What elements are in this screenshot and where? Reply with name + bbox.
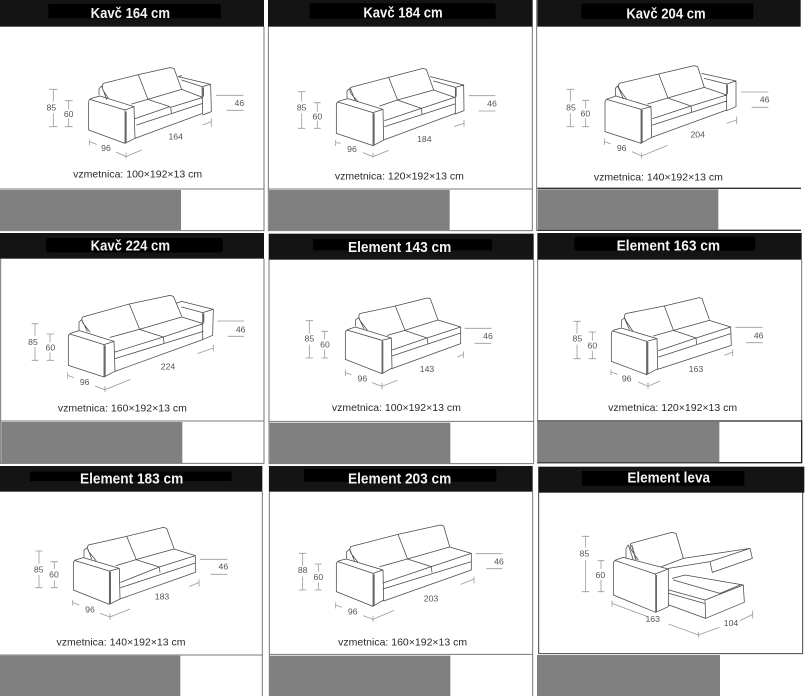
dimension marks: 88 bbox=[298, 565, 308, 575]
dimension marks: 46 bbox=[235, 98, 244, 108]
header: Element 183 cm: Element 183 cm bbox=[80, 471, 183, 487]
panel: Kavč 224 cm bbox=[0, 233, 264, 464]
dimension marks: 46 bbox=[760, 95, 770, 105]
dimension marks bbox=[298, 553, 504, 622]
dimension marks: 203 bbox=[424, 593, 438, 603]
dimension marks: 60 bbox=[46, 342, 55, 352]
grey swatch bbox=[538, 189, 718, 230]
sofa drawing bbox=[73, 527, 195, 604]
sofa drawing bbox=[611, 298, 731, 375]
header: Element 183 cm bbox=[0, 466, 262, 492]
sofa drawing bbox=[605, 66, 736, 143]
dimension marks: 60 bbox=[588, 341, 597, 351]
header: Kavč 204 cm bbox=[537, 0, 801, 27]
header: Kavč 184 cm: Kavč 184 cm bbox=[363, 5, 443, 21]
dimension marks: 60 bbox=[581, 108, 590, 118]
header: Kavč 224 cm: Kavč 224 cm bbox=[91, 239, 170, 255]
dimension marks bbox=[34, 551, 228, 620]
dimension marks: 183 bbox=[155, 591, 169, 601]
dimension marks: 96 bbox=[348, 606, 358, 616]
grey swatch bbox=[0, 656, 180, 696]
mattress size: vzmetnica: 160×192×13 cm bbox=[338, 637, 467, 648]
dimension marks bbox=[566, 89, 770, 158]
header: Element leva bbox=[539, 467, 804, 493]
dimension marks: 46 bbox=[236, 324, 246, 334]
mattress size: vzmetnica: 140×192×13 cm bbox=[594, 172, 723, 183]
dimension marks: 104 bbox=[724, 618, 738, 628]
mattress size: vzmetnica: 160×192×13 cm bbox=[58, 404, 187, 415]
header: Element 203 cm bbox=[269, 466, 533, 492]
grey swatch bbox=[1, 422, 182, 463]
dimension marks: 96 bbox=[622, 374, 632, 384]
dimension marks: 96 bbox=[80, 377, 90, 387]
dimension marks: 164 bbox=[168, 132, 183, 142]
sofa drawing bbox=[345, 298, 461, 374]
dimension marks: 85 bbox=[566, 103, 576, 113]
panel: Element 163 cm bbox=[538, 233, 802, 464]
header: Element leva: Element leva bbox=[627, 471, 711, 487]
header: Kavč 184 cm bbox=[268, 0, 533, 27]
header: Element 143 cm: Element 143 cm bbox=[348, 240, 451, 256]
panel: Kavč 204 cm bbox=[537, 0, 801, 231]
dimension marks: 60 bbox=[49, 570, 59, 580]
header: Element 163 cm: Element 163 cm bbox=[617, 239, 720, 255]
dimension marks: 96 bbox=[85, 604, 95, 614]
header: Element 203 cm: Element 203 cm bbox=[348, 471, 451, 487]
panel: Element 183 cm bbox=[0, 466, 262, 696]
dimension marks: 46 bbox=[754, 330, 764, 340]
dimension marks: 85 bbox=[573, 334, 582, 344]
dimension marks: 46 bbox=[219, 562, 228, 572]
dimension marks bbox=[573, 321, 764, 389]
dimension marks: 60 bbox=[320, 339, 330, 349]
dimension marks: 60 bbox=[64, 109, 74, 119]
mattress size: vzmetnica: 100×192×13 cm bbox=[332, 403, 461, 414]
header: Kavč 204 cm: Kavč 204 cm bbox=[626, 7, 706, 23]
dimension marks bbox=[28, 321, 246, 392]
grey swatch bbox=[270, 423, 450, 463]
dimension marks: 224 bbox=[161, 361, 175, 371]
sofa drawing bbox=[89, 68, 211, 143]
mattress size: vzmetnica: 140×192×13 cm bbox=[56, 637, 185, 648]
mattress size: vzmetnica: 100×192×13 cm bbox=[73, 169, 202, 180]
dimension marks: 163 bbox=[689, 364, 703, 374]
dimension marks: 85 bbox=[34, 565, 44, 575]
panel: Element leva bbox=[537, 467, 804, 696]
panel: Element 143 cm bbox=[269, 234, 534, 464]
dimension marks: 96 bbox=[358, 374, 367, 384]
grey swatch bbox=[0, 190, 181, 230]
grey swatch bbox=[269, 190, 450, 230]
mattress size: vzmetnica: 120×192×13 cm bbox=[608, 403, 737, 414]
grey swatch bbox=[270, 656, 450, 696]
dimension marks: 85 bbox=[297, 103, 307, 113]
dimension marks: 143 bbox=[420, 364, 434, 374]
dimension marks: 96 bbox=[101, 143, 111, 153]
dimension marks: 46 bbox=[483, 331, 493, 341]
dimension marks bbox=[580, 536, 753, 638]
grey swatch bbox=[538, 422, 719, 462]
panel: Element 203 cm bbox=[269, 466, 533, 696]
header: Element 143 cm bbox=[269, 234, 534, 260]
dimension marks: 85 bbox=[580, 549, 589, 559]
dimension marks: 96 bbox=[347, 144, 357, 154]
sofa drawing bbox=[336, 525, 471, 606]
dimension marks: 163 bbox=[645, 614, 660, 624]
dimension marks: 60 bbox=[313, 112, 322, 122]
dimension marks: 46 bbox=[494, 557, 504, 567]
dimension marks: 96 bbox=[617, 143, 627, 153]
dimension marks bbox=[47, 89, 244, 158]
header: Kavč 224 cm bbox=[0, 233, 264, 259]
sofa drawing bbox=[336, 68, 464, 146]
dimension marks: 85 bbox=[305, 334, 314, 344]
dimension marks: 46 bbox=[487, 99, 497, 109]
header: Kavč 164 cm: Kavč 164 cm bbox=[91, 6, 170, 22]
sofa with open storage drawing bbox=[613, 532, 752, 618]
dimension marks: 204 bbox=[690, 130, 705, 140]
dimension marks bbox=[297, 92, 497, 157]
dimension marks: 85 bbox=[28, 337, 38, 347]
sofa drawing bbox=[68, 295, 213, 377]
dimension marks: 60 bbox=[596, 570, 605, 580]
dimension marks: 184 bbox=[417, 134, 432, 144]
grey swatch bbox=[537, 655, 720, 696]
dimension marks bbox=[305, 321, 493, 389]
header: Kavč 164 cm bbox=[0, 0, 264, 27]
mattress size: vzmetnica: 120×192×13 cm bbox=[335, 172, 464, 183]
dimension marks: 85 bbox=[47, 103, 56, 113]
dimension marks: 60 bbox=[314, 572, 323, 582]
header: Element 163 cm bbox=[538, 233, 802, 260]
panel: Kavč 164 cm bbox=[0, 0, 264, 231]
panel: Kavč 184 cm bbox=[268, 0, 533, 231]
